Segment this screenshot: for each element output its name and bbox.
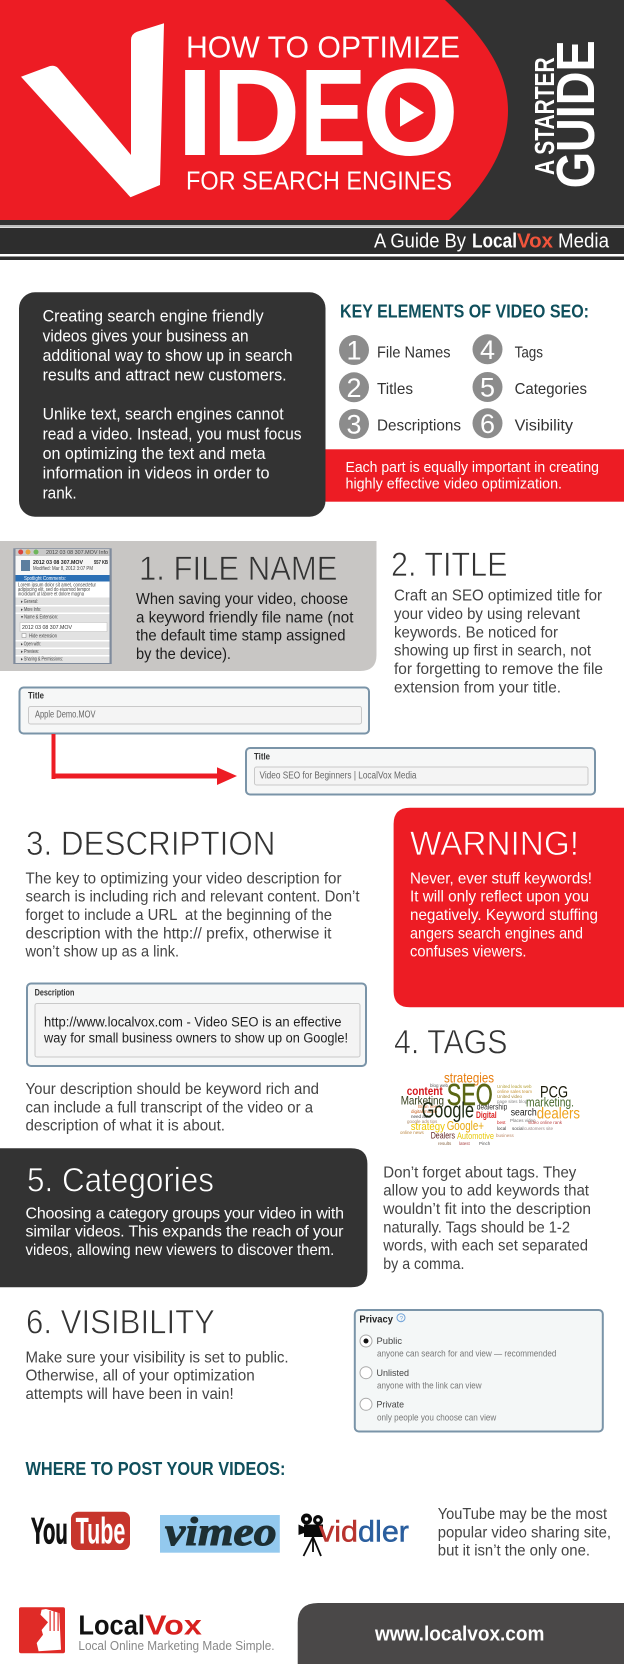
logo: vimeo: vimeo	[165, 1509, 277, 1554]
text: description note: Your description should be keyword rich and	[26, 1081, 319, 1098]
text: description note: description of what it is about.	[26, 1118, 225, 1135]
text: description body: description with the http:// prefix, otherwise it	[26, 925, 332, 942]
chart: tag word cloud: online sales team	[497, 1089, 532, 1094]
footer: website	[298, 1603, 624, 1664]
text: tags body: allow you to add keywords that	[383, 1183, 590, 1200]
form: new title	[246, 748, 595, 794]
text: youtube note	[438, 1506, 611, 1560]
logo: viddler: viddler	[319, 1516, 409, 1549]
panel: warning	[394, 808, 624, 1007]
text: file name body: the default time stamp assigned	[136, 628, 346, 645]
chart: tag word cloud: results	[438, 1141, 452, 1146]
title: how to optimize: HOW TO OPTIMIZE	[186, 29, 460, 64]
text: youtube note: but it isn’t the only one.	[438, 1543, 590, 1560]
screenshot: file info window: incididunt ut labore et dolore magna	[18, 592, 84, 598]
title: video: O	[362, 44, 459, 182]
heading: description: 3. DESCRIPTION	[26, 825, 276, 863]
text: tags body: Don’t forget about tags. They	[383, 1164, 576, 1181]
chart: tag word cloud: SEO	[447, 1077, 493, 1112]
text: tags body: words, with each set separated	[382, 1238, 588, 1255]
form: privacy settings: Private	[376, 1400, 404, 1411]
chart: tag word cloud: Brian need	[418, 1104, 440, 1109]
chart: tag word cloud: search	[511, 1107, 537, 1118]
panel: intro	[19, 292, 326, 517]
form: description: way for small business owners to show up on Google!	[43, 1031, 348, 1046]
logo: youtube	[31, 1510, 130, 1551]
arrow: old title to new title	[52, 734, 237, 785]
form: description	[27, 984, 366, 1066]
panel: file name	[0, 541, 376, 671]
text: tags body: naturally. Tags should be 1-2	[383, 1219, 570, 1236]
panel: categories: 5. Categories	[27, 1162, 214, 1200]
list: key elements: Tags	[515, 344, 543, 361]
chart: tag word cloud: Pinch	[479, 1141, 491, 1146]
heading: key elements: KEY ELEMENTS OF VIDEO SEO:	[340, 301, 589, 321]
list: key elements: Visibility	[515, 418, 573, 435]
chart: tag word cloud: best	[497, 1120, 506, 1125]
panel: intro: results and attract new customers.	[43, 367, 287, 385]
red header shape	[0, 0, 508, 220]
logo: youtube: You	[31, 1510, 68, 1551]
text: youtube note: YouTube may be the most	[438, 1506, 608, 1523]
list: key elements: File Names	[377, 344, 450, 361]
chart: tag word cloud: United video	[497, 1094, 523, 1099]
form: privacy settings: Public	[376, 1336, 402, 1347]
chart: tag word cloud: Marketing	[401, 1093, 444, 1107]
panel: categories: videos, allowing new viewers to discover them.	[26, 1242, 334, 1259]
panel: intro: additional way to show up in search	[43, 347, 293, 365]
chart: tag word cloud: social	[512, 1126, 524, 1131]
chart: tag word cloud: need auto	[411, 1114, 432, 1119]
text: tags body: wouldn’t fit into the description	[382, 1201, 591, 1218]
form: privacy settings: Unlisted	[376, 1368, 409, 1379]
screenshot: file info window: adipiscing elit, sed do eiusmod tempor	[18, 587, 90, 593]
panel: warning: angers search engines and	[410, 925, 583, 942]
panel: intro: Creating search engine friendly	[43, 308, 264, 326]
text: file name body: When saving your video, choose	[136, 591, 348, 608]
side title: a starter guide: A STARTER	[529, 57, 560, 175]
byline: Media	[558, 230, 610, 252]
heading: title: 2. TITLE	[391, 546, 508, 584]
list: key elements: Descriptions	[377, 418, 461, 435]
byline	[374, 230, 610, 252]
form: privacy settings: Privacy	[359, 1313, 393, 1325]
chart: tag word cloud: Digital	[476, 1110, 497, 1120]
logo: localvox	[19, 1607, 275, 1653]
title: video: E	[300, 44, 366, 182]
text: description note	[26, 1081, 319, 1135]
logo: viddler	[298, 1514, 409, 1556]
heading: file name: 1. FILE NAME	[139, 550, 338, 588]
list: key elements: 5	[480, 372, 495, 402]
title: video	[176, 44, 459, 182]
list: key elements: Titles	[377, 381, 413, 398]
chart: tag word cloud: content	[407, 1084, 443, 1098]
list: key elements: 3	[346, 410, 362, 440]
chart: tag word cloud: Dealers	[431, 1130, 455, 1140]
chart: tag word cloud: customers site	[524, 1126, 554, 1131]
text: tags body: by a comma.	[383, 1256, 464, 1273]
side title: a starter guide: GUIDE	[546, 40, 606, 188]
logo: youtube: Tube	[76, 1510, 125, 1551]
text: file name body	[136, 591, 354, 663]
chart: tag word cloud: google ads tips	[407, 1119, 438, 1124]
screenshot: file info window: ▾ Name & Extension:	[21, 614, 58, 620]
side title: a starter guide	[529, 40, 606, 188]
screenshot: file info window: ▸ Sharing & Permissions:	[21, 656, 63, 662]
list: key elements: 6	[480, 409, 495, 439]
byline: A Guide By	[374, 230, 466, 252]
header banner	[0, 0, 624, 260]
chart: tag word cloud: digital mobile	[411, 1109, 438, 1114]
screenshot: file info window: ▸ Preview:	[21, 649, 39, 655]
panel: categories: Choosing a category groups your video in with	[26, 1205, 344, 1222]
text: tags body	[382, 1164, 591, 1273]
text: title body: your video by using relevant	[394, 606, 581, 623]
screenshot: file info window: 2012 03 08 307.MOV	[22, 625, 72, 631]
panel: categories: similar videos. This expands the reach of your	[26, 1224, 344, 1241]
screenshot: file info window: 2012 03 08 307.MOV	[33, 560, 84, 566]
chart: tag word cloud: latest	[459, 1141, 471, 1146]
text: description body: The key to optimizing your video description for	[26, 870, 342, 887]
panel: warning: negatively. Keyword stuffing	[410, 907, 598, 924]
screenshot: file info window: Spotlight Comments:	[24, 576, 66, 582]
chart: tag word cloud: online news	[400, 1130, 425, 1135]
title: video: I	[176, 44, 214, 182]
text: title body	[394, 588, 603, 696]
form: description: http://www.localvox.com - Video SEO is an effective	[44, 1015, 342, 1030]
icon: large V letter	[21, 23, 164, 197]
chart: tag word cloud: dealership	[477, 1102, 508, 1111]
icon: hand and face	[37, 1609, 61, 1651]
screenshot: file info window: Hide extension	[29, 634, 57, 640]
chart: tag word cloud: Places video	[510, 1118, 536, 1123]
list: key elements: 2	[346, 373, 362, 403]
heading: tags: 4. TAGS	[394, 1023, 508, 1061]
chart: tag word cloud: Automotive	[457, 1131, 494, 1141]
chart: tag word cloud: Google+	[447, 1118, 484, 1133]
chart: tag word cloud	[400, 1070, 580, 1146]
byline: Vox	[517, 230, 553, 252]
chart: tag word cloud: Google	[422, 1097, 474, 1122]
text: visibility body: Otherwise, all of your optimization	[26, 1368, 255, 1385]
screenshot: file info window: ▸ General:	[21, 599, 38, 605]
panel: intro: rank.	[43, 484, 77, 502]
icon: play triangle	[400, 97, 424, 127]
screenshot: file info window: Modified: Mar 8, 2012 3:07 PM	[33, 566, 93, 572]
chart: tag word cloud: dealers	[537, 1105, 580, 1122]
panel: intro: information in videos in order to	[43, 465, 270, 483]
text: description body: search is including rich and relevant content. Don’t	[26, 889, 360, 906]
form: old title	[20, 688, 369, 734]
callout: equally important: highly effective video optimization.	[346, 477, 562, 493]
text: title body: showing up first in search, not	[394, 643, 592, 660]
list: key elements: 1	[346, 336, 362, 366]
title: for search engines: FOR SEARCH ENGINES	[186, 167, 452, 195]
text: file name body: a keyword friendly file name (not	[136, 609, 354, 626]
text: title body: for forgetting to remove the file	[394, 661, 603, 678]
panel: warning: confuses viewers.	[410, 944, 526, 961]
chart: tag word cloud: video online rank	[528, 1120, 563, 1125]
text: description note: can include a full transcript of the video or a	[26, 1099, 313, 1116]
screenshot: file info window: Lorem ipsum dolor sit amet, consectetur	[18, 582, 96, 588]
chart: tag word cloud: local	[497, 1126, 506, 1131]
form: old title: Title	[28, 690, 44, 700]
chart: tag word cloud: business	[496, 1133, 515, 1138]
form: old title: Apple Demo.MOV	[35, 710, 96, 721]
chart: tag word cloud: blog web	[430, 1083, 449, 1088]
text: visibility body: attempts will have been in vain!	[26, 1386, 234, 1403]
form: privacy settings	[355, 1310, 603, 1432]
chart: tag word cloud: strategy	[411, 1121, 445, 1133]
chart: tag word cloud: marketing.	[526, 1095, 574, 1110]
text: description body: won’t show up as a link.	[25, 944, 179, 961]
form: privacy settings: ?	[400, 1316, 404, 1322]
form: privacy settings: anyone with the link can view	[377, 1381, 482, 1391]
text: visibility body	[26, 1349, 289, 1403]
screenshot: file info window: ▸ More Info:	[21, 607, 41, 613]
logo: localvox: Local Online Marketing Made Simple.	[78, 1638, 275, 1653]
text: title body: keywords. Be noticed for	[394, 624, 559, 641]
text: description body: forget to include a URL at the beginning of the	[26, 907, 332, 924]
panel: intro: read a video. Instead, you must focus	[43, 425, 302, 443]
text: title body: Craft an SEO optimized title for	[394, 588, 603, 605]
panel: categories	[0, 1148, 367, 1287]
heading: visibility: 6. VISIBILITY	[26, 1303, 215, 1341]
list: key elements: 4	[480, 335, 495, 365]
chart: tag word cloud: PCG	[540, 1082, 568, 1101]
list: key elements	[339, 334, 587, 440]
chart: tag word cloud: page sites blog	[497, 1099, 528, 1104]
screenshot: file info window: 2012 03 08 307.MOV Info	[46, 550, 108, 556]
panel: warning: It will only reflect upon you	[410, 889, 589, 906]
panel: warning: Never, ever stuff keywords!	[410, 870, 592, 887]
heading: where to post: WHERE TO POST YOUR VIDEOS:	[26, 1459, 285, 1479]
panel: warning: WARNING!	[410, 825, 579, 863]
logo: localvox: Vox	[145, 1609, 202, 1640]
list: key elements: Categories	[515, 381, 587, 398]
form: privacy settings: anyone can search for and view — recommended	[377, 1349, 556, 1359]
panel: intro: on optimizing the text and meta	[43, 445, 266, 463]
form: new title: Video SEO for Beginners | LocalVox Media	[260, 770, 417, 781]
text: visibility body: Make sure your visibility is set to public.	[26, 1349, 289, 1366]
text: youtube note: popular video sharing site,	[438, 1524, 611, 1541]
text: title body: extension from your title.	[394, 679, 561, 696]
byline: Local	[472, 230, 517, 252]
form: privacy settings: only people you choose can view	[377, 1413, 497, 1423]
title: video: D	[212, 44, 301, 182]
text: file name body: by the device).	[136, 646, 231, 663]
panel: intro: videos gives your business an	[43, 327, 249, 345]
text: description body	[25, 870, 360, 961]
callout: equally important	[326, 449, 624, 502]
footer: website: www.localvox.com	[374, 1624, 544, 1646]
logo: localvox: Local	[78, 1609, 145, 1640]
chart: tag word cloud: strategies	[444, 1070, 494, 1086]
callout: equally important: Each part is equally important in creating	[346, 460, 599, 476]
form: description: Description	[35, 988, 74, 998]
chart: tag word cloud: United leads web	[497, 1084, 532, 1089]
screenshot: file info window	[13, 548, 112, 664]
panel: intro: Unlike text, search engines cannot	[43, 406, 284, 424]
screenshot: file info window: 557 KB	[94, 560, 108, 566]
screenshot: file info window: ▸ Open with:	[21, 642, 41, 648]
form: new title: Title	[254, 751, 270, 761]
